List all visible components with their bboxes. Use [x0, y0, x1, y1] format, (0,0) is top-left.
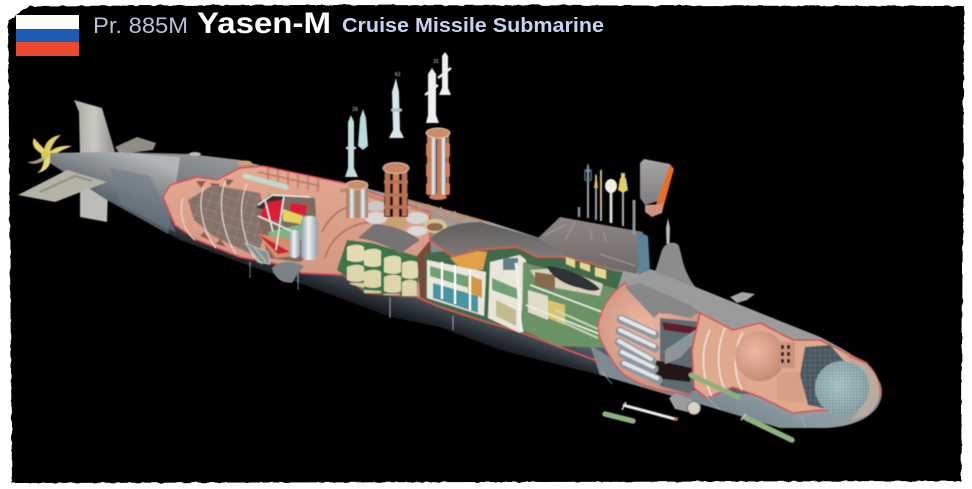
forward section	[692, 313, 880, 421]
drum	[777, 372, 805, 403]
missile group 29	[345, 107, 368, 177]
bulkhead rings	[692, 313, 869, 413]
upper rudder	[74, 100, 115, 155]
outer red edge	[849, 356, 880, 396]
grey upper hull over compartments	[430, 222, 625, 272]
title: project number: Pr. 885M	[93, 13, 188, 38]
bow hull lower shell	[590, 345, 880, 428]
tail panel plating	[110, 168, 176, 232]
title: role: Cruise Missile Submarine	[342, 15, 604, 37]
launch canister 2	[383, 162, 409, 217]
pod on hull	[669, 393, 696, 413]
missile group 63	[389, 72, 404, 138]
bow fin mast	[666, 218, 670, 244]
forward pressure dome	[735, 331, 785, 381]
dark inner bay	[660, 318, 702, 394]
tube highlights	[619, 318, 657, 378]
stern pod	[272, 262, 304, 283]
white missile	[622, 402, 678, 421]
grey deck panels	[625, 283, 700, 318]
bow top hull	[625, 270, 870, 372]
orange mast head	[640, 159, 674, 217]
loose weapons	[605, 402, 792, 440]
dark torpedo stowage	[547, 266, 600, 291]
dome ring band	[340, 190, 404, 210]
cream drum compartment	[337, 240, 420, 297]
machinery cylinder	[188, 185, 268, 257]
hull frame lines	[250, 262, 806, 428]
rear superstructure ribs	[258, 168, 320, 192]
frame ribs	[181, 180, 254, 258]
crew room	[450, 251, 487, 270]
hatch cover	[358, 224, 420, 254]
launch canister 3	[426, 128, 450, 200]
lower rudder	[80, 180, 108, 222]
green torpedo left	[605, 414, 633, 421]
collar	[417, 240, 434, 302]
right stern plane	[115, 137, 156, 154]
cabin block B	[488, 255, 526, 333]
sail markings	[545, 222, 636, 266]
hull marker	[238, 160, 252, 166]
left stern plane	[18, 170, 107, 202]
forward green compartments	[425, 247, 623, 347]
yellow windows	[566, 257, 606, 279]
silver tanks	[289, 216, 318, 260]
hatch grid	[778, 342, 795, 368]
nose cap	[842, 352, 880, 421]
missile group 31	[425, 52, 451, 123]
deck truss	[407, 200, 485, 226]
sonar sphere	[815, 361, 869, 415]
propeller	[27, 135, 72, 173]
green torpedo on hull	[691, 375, 738, 397]
label: 29	[352, 107, 358, 113]
striped hatch	[245, 243, 270, 264]
main hull	[50, 152, 882, 428]
open silo hatches	[365, 201, 447, 236]
cut edge	[430, 240, 620, 270]
plane shading	[40, 176, 92, 192]
dive plane	[730, 292, 755, 303]
cabin block A	[427, 260, 486, 316]
drum row 3	[350, 283, 400, 295]
title: class name: Yasen-M	[197, 7, 331, 40]
label: 31	[433, 59, 439, 65]
submarine cutaway	[18, 52, 882, 440]
launch canister 1	[346, 180, 368, 218]
dome arcs	[322, 203, 370, 258]
torpedo room	[598, 283, 712, 395]
rear and mid section cut	[163, 166, 430, 300]
torpedo tubes	[619, 319, 658, 380]
sail	[538, 217, 643, 274]
scalloped shadows	[196, 179, 234, 247]
label: 63	[395, 72, 400, 78]
drum row 1	[347, 245, 418, 279]
green pipe	[245, 176, 286, 187]
dark sonar bay	[800, 345, 845, 410]
bow dome	[598, 283, 712, 395]
sail front	[637, 231, 650, 275]
hull hatch	[189, 152, 201, 156]
sonar mesh	[815, 361, 869, 415]
tail plating	[50, 152, 180, 234]
cabin block C	[516, 262, 620, 348]
bow fin	[655, 243, 705, 298]
tube loader	[665, 330, 705, 364]
title	[93, 7, 604, 40]
exposed drum	[688, 402, 700, 414]
green torpedo right	[741, 414, 792, 440]
masts	[579, 163, 634, 235]
drum row 2	[347, 265, 417, 296]
icon: Russian flag	[16, 15, 79, 56]
engine bay	[245, 194, 318, 264]
lower cut edge	[417, 297, 600, 362]
